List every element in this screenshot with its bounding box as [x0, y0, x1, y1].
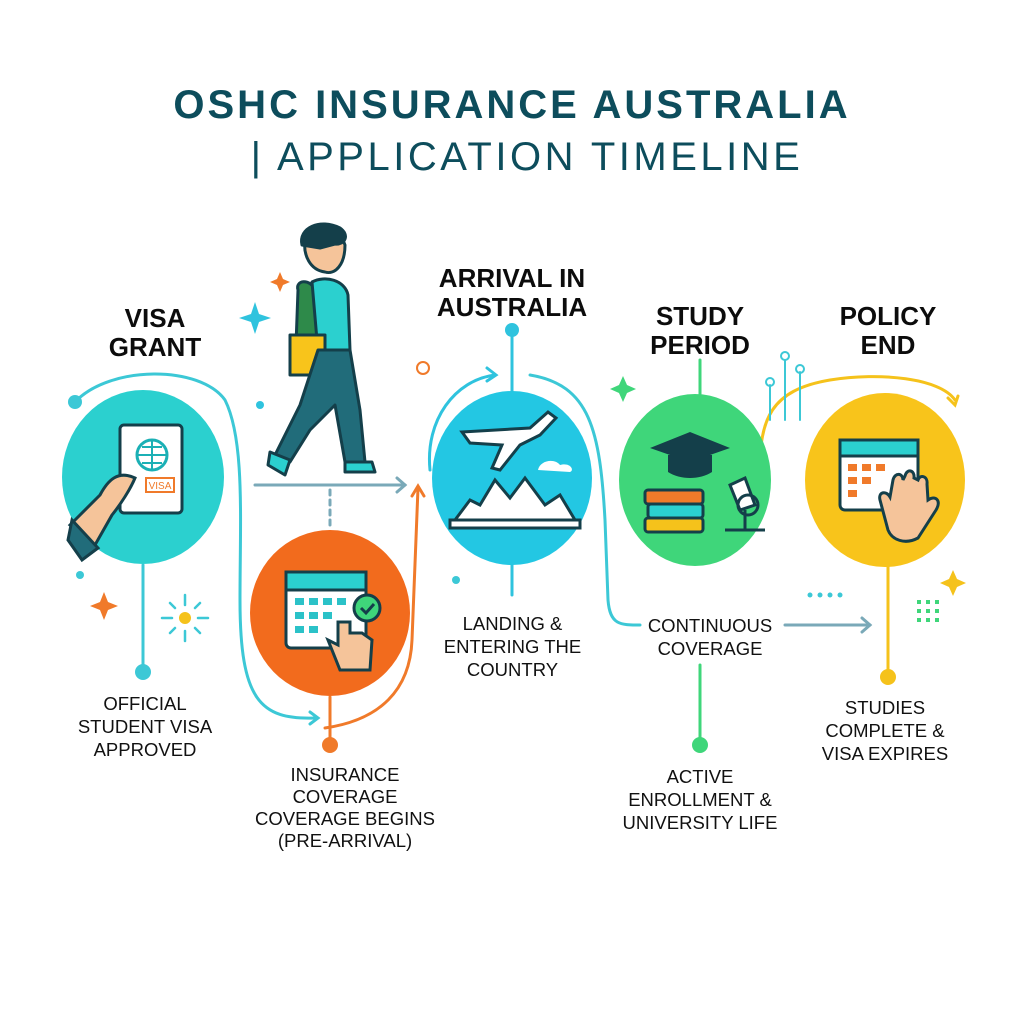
text: visa approved	[78, 693, 212, 760]
text: insurance begins: COVERAGE BEGINS	[255, 808, 435, 829]
text: visa approved: OFFICIAL	[103, 693, 187, 714]
text: insurance begins	[255, 764, 435, 851]
circle: policy end	[805, 393, 965, 567]
circle: visa	[62, 390, 224, 564]
heading: visa grant: GRANT	[109, 332, 201, 362]
heading: arrival: AUSTRALIA	[437, 292, 587, 322]
title: | APPLICATION TIMELINE	[251, 135, 803, 179]
text: insurance begins: INSURANCE	[291, 764, 399, 785]
text: continuous coverage: COVERAGE	[658, 638, 762, 659]
text: landing: COUNTRY	[467, 659, 558, 680]
text: landing: LANDING &	[463, 613, 562, 634]
text: active enrollment	[623, 766, 777, 833]
icon: walking student	[268, 224, 375, 475]
heading: visa grant: VISA	[125, 303, 185, 333]
circle: insurance	[250, 530, 410, 696]
text: insurance begins: COVERAGE	[293, 786, 397, 807]
heading: study period	[650, 301, 750, 360]
text: studies complete	[822, 697, 948, 764]
circle: visa: VISA	[149, 481, 172, 492]
text: active enrollment: UNIVERSITY LIFE	[623, 812, 777, 833]
title: OSHC INSURANCE AUSTRALIA	[173, 83, 851, 127]
text: visa approved: STUDENT VISA	[78, 716, 212, 737]
text: insurance begins: (PRE-ARRIVAL)	[278, 830, 412, 851]
text: visa approved: APPROVED	[94, 739, 196, 760]
text: active enrollment: ENROLLMENT &	[628, 789, 772, 810]
heading: policy end: END	[861, 330, 915, 360]
text: studies complete: COMPLETE &	[825, 720, 945, 741]
heading: visa grant	[109, 303, 201, 362]
text: continuous coverage: CONTINUOUS	[648, 615, 772, 636]
heading: arrival	[437, 263, 587, 322]
heading: policy end	[840, 301, 936, 360]
heading: policy end: POLICY	[840, 301, 936, 331]
title	[173, 83, 851, 179]
text: continuous coverage	[648, 615, 772, 659]
heading: study period: PERIOD	[650, 330, 750, 360]
heading: arrival: ARRIVAL IN	[439, 263, 585, 293]
text: studies complete: VISA EXPIRES	[822, 743, 948, 764]
circle: study	[619, 394, 771, 566]
text: landing	[444, 613, 581, 680]
text: studies complete: STUDIES	[845, 697, 925, 718]
circle: arrival	[432, 391, 592, 565]
text: active enrollment: ACTIVE	[667, 766, 733, 787]
text: landing: ENTERING THE	[444, 636, 581, 657]
heading: study period: STUDY	[656, 301, 744, 331]
